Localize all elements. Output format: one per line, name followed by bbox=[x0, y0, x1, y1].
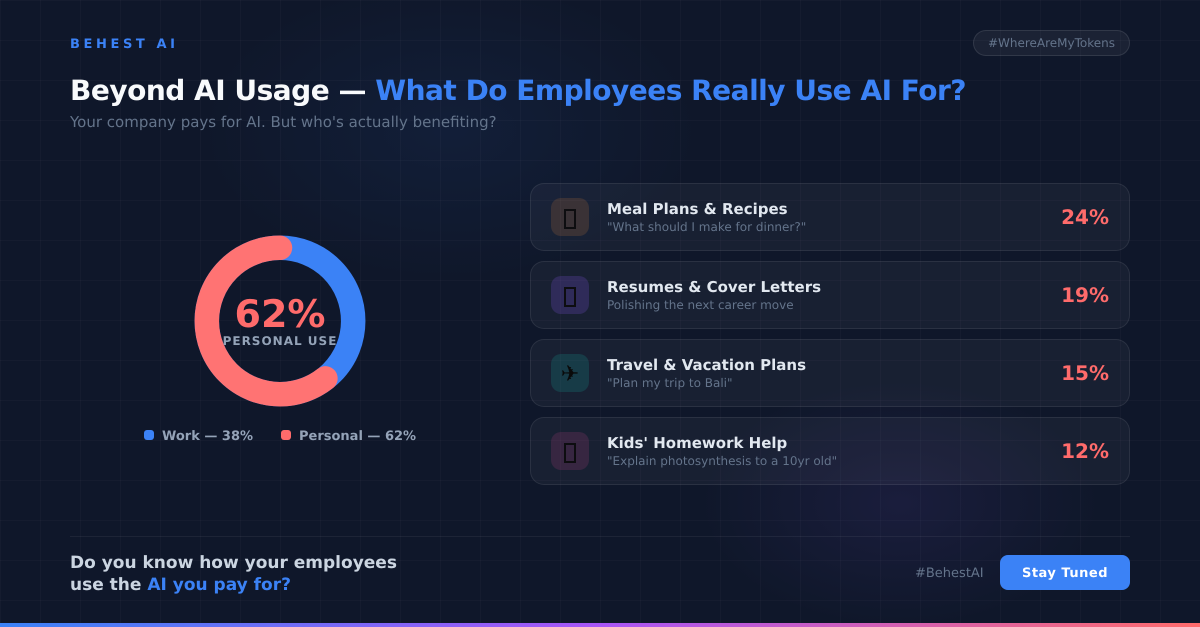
legend bbox=[144, 429, 416, 444]
card title: Travel & Vacation Plans bbox=[607, 356, 806, 374]
bottom gradient bar bbox=[0, 623, 1200, 627]
legend: personal: Personal — 62% bbox=[299, 429, 416, 444]
donut chart bbox=[194, 236, 366, 406]
card percent: 24% bbox=[1061, 205, 1109, 229]
icon: airplane: ✈ bbox=[561, 362, 579, 387]
card percent: 12% bbox=[1061, 439, 1109, 463]
card title: Resumes & Cover Letters bbox=[607, 278, 821, 296]
brand label: BEHEST AI bbox=[70, 37, 179, 52]
icon: resume bbox=[551, 276, 589, 314]
footer hashtag: #BehestAI bbox=[915, 566, 984, 581]
footer divider bbox=[70, 536, 1130, 537]
card title: Meal Plans & Recipes bbox=[607, 200, 788, 218]
card: travel bbox=[530, 339, 1130, 407]
icon: meal bbox=[551, 198, 589, 236]
button bbox=[1000, 555, 1130, 590]
card quote: "What should I make for dinner?" bbox=[607, 220, 806, 234]
donut caption: PERSONAL USE bbox=[223, 334, 337, 348]
footer question: use the AI you pay for? bbox=[70, 575, 291, 595]
card quote: Polishing the next career move bbox=[607, 298, 794, 312]
donut value: 62% bbox=[235, 292, 325, 336]
hashtag pill bbox=[973, 30, 1130, 56]
card quote: "Plan my trip to Bali" bbox=[607, 376, 733, 390]
button: Stay Tuned bbox=[1022, 566, 1108, 581]
title: Beyond AI Usage — What Do Employees Really Use AI For? bbox=[70, 74, 966, 107]
card percent: 15% bbox=[1061, 361, 1109, 385]
card: homework bbox=[530, 417, 1130, 485]
footer question bbox=[70, 553, 397, 595]
legend: work: Work — 38% bbox=[162, 429, 253, 444]
card: resumes bbox=[530, 261, 1130, 329]
icon: homework bbox=[551, 432, 589, 470]
icon: airplane bbox=[551, 354, 589, 392]
hashtag pill: #WhereAreMyTokens bbox=[988, 36, 1115, 50]
card percent: 19% bbox=[1061, 283, 1109, 307]
footer question: Do you know how your employees bbox=[70, 553, 397, 573]
card: meal plans bbox=[530, 183, 1130, 251]
card title: Kids' Homework Help bbox=[607, 434, 787, 452]
subtitle: Your company pays for AI. But who's actually benefiting? bbox=[70, 113, 497, 131]
card quote: "Explain photosynthesis to a 10yr old" bbox=[607, 454, 837, 468]
